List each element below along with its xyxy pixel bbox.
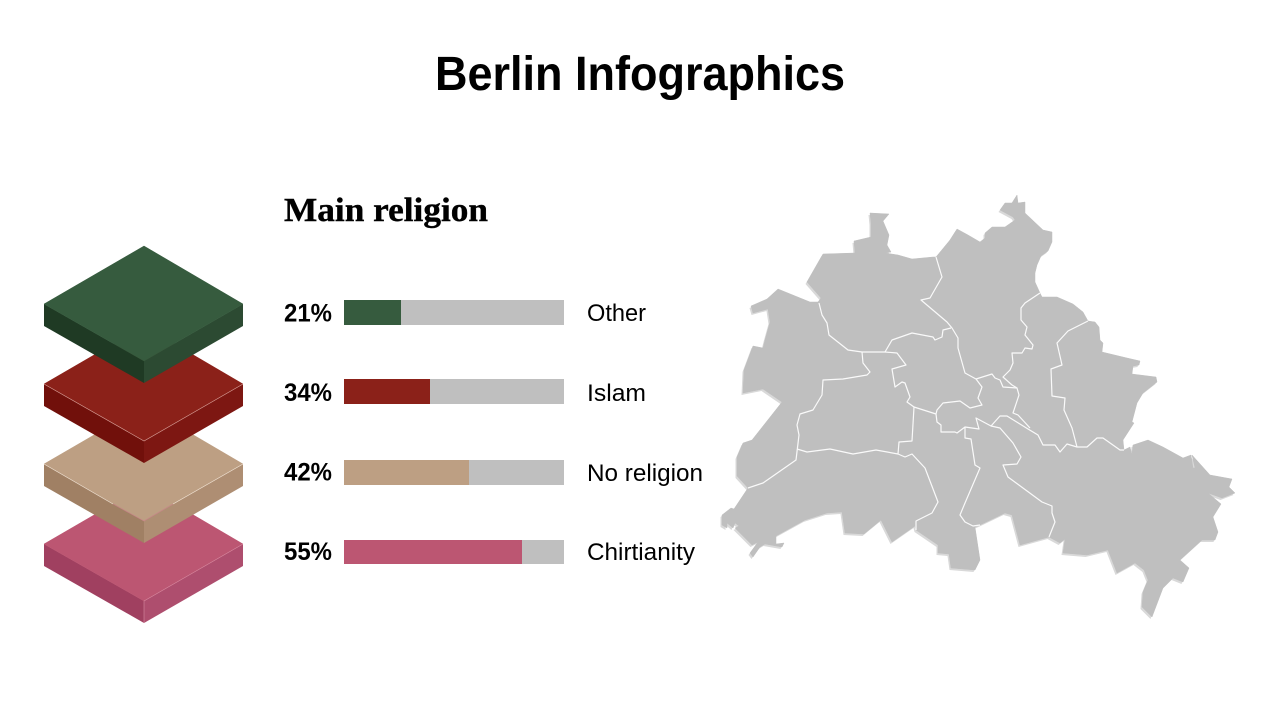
row: no religion 42% [284,458,703,487]
district borders [748,257,1124,537]
row: christianity 55%: Chirtianity [587,539,695,566]
row: islam 34%: Islam [587,380,646,407]
map: Berlin districts [720,195,1235,619]
row: other 21%: Other [587,300,646,327]
row: other 21%: 21% [284,300,332,328]
row: no religion 42%: 42% [284,458,332,486]
row: islam 34%: 34% [284,379,332,407]
row: christianity 55%: 55% [284,538,332,566]
layer: red [44,326,243,463]
heading: main religion: Main religion [284,192,488,229]
map shadow [720,197,1234,619]
layer: tan [44,406,243,543]
row: other 21% [284,300,646,328]
layer: pink [44,486,243,623]
row: islam 34% [284,379,646,407]
row: christianity 55% [284,538,695,566]
title: Berlin Infographics [435,48,845,101]
row: no religion 42%: No religion [587,460,703,487]
isometric layer stack [44,246,243,623]
layer: green [44,246,243,383]
map fill [722,195,1235,617]
